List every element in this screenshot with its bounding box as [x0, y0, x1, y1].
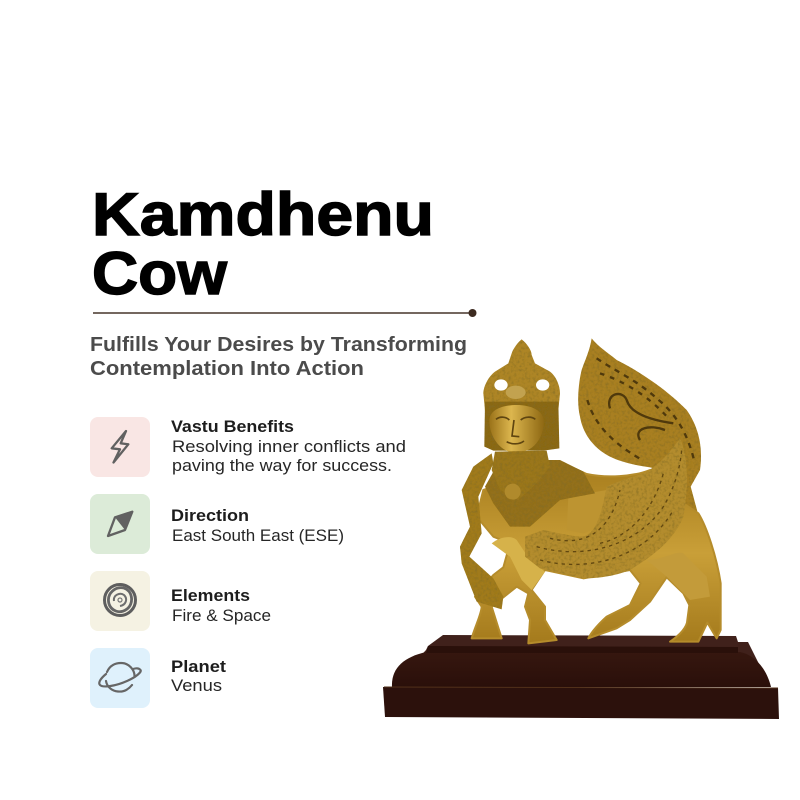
subtitle: Fulfills Your Desires by Transforming: [90, 333, 467, 356]
peacock wing: [525, 438, 687, 578]
icon: ringed planet: [90, 648, 150, 708]
text: direction: Direction: [171, 507, 249, 525]
subtitle: [90, 333, 467, 380]
text: vastu benefits: paving the way for success.: [172, 457, 392, 475]
hair: [484, 402, 559, 451]
crown jewel: [506, 386, 526, 399]
wing feather lines: [537, 450, 682, 564]
base moulding: [392, 652, 771, 687]
face: [489, 405, 544, 453]
base plinth: [383, 687, 779, 719]
row: vastu benefits: [90, 417, 406, 477]
brass statue of Kamdhenu: [460, 338, 721, 643]
text: elements: [171, 587, 271, 625]
text: planet: [171, 658, 227, 695]
pendant: [505, 484, 521, 500]
subtitle: Contemplation Into Action: [90, 357, 364, 380]
row: elements: [90, 571, 271, 631]
text: planet: Planet: [171, 658, 227, 676]
divider line with dot: [93, 309, 476, 317]
fan engraving: [587, 358, 694, 461]
text: vastu benefits: Resolving inner conflicts and: [172, 438, 406, 456]
body highlights: [492, 537, 545, 590]
row: direction: [90, 494, 344, 554]
row: planet: [90, 648, 227, 708]
shoulder drape: [485, 460, 595, 527]
title: Kamdhenu: [92, 181, 434, 248]
title: Cow: [92, 240, 227, 307]
icon: spiral: [90, 571, 150, 631]
facial features: [496, 417, 535, 444]
text: elements: Elements: [171, 587, 250, 605]
text: elements: Fire & Space: [172, 607, 271, 625]
title: [92, 181, 434, 307]
text: direction: East South East (ESE): [172, 527, 344, 545]
braid and left arm: [460, 453, 503, 609]
crown: [483, 339, 560, 410]
icon: compass needle: [90, 494, 150, 554]
text: vastu benefits: Vastu Benefits: [171, 418, 294, 436]
crown openings: [494, 379, 508, 391]
wooden base: [383, 635, 779, 719]
necklace: [492, 451, 550, 500]
text: planet: Venus: [171, 677, 222, 695]
peacock tail fan: [578, 338, 701, 515]
text: direction: [171, 507, 344, 545]
icon: lightning bolt: [90, 417, 150, 477]
text: vastu benefits: [171, 418, 406, 475]
base top plate: [392, 635, 770, 686]
cow body: [472, 463, 721, 643]
